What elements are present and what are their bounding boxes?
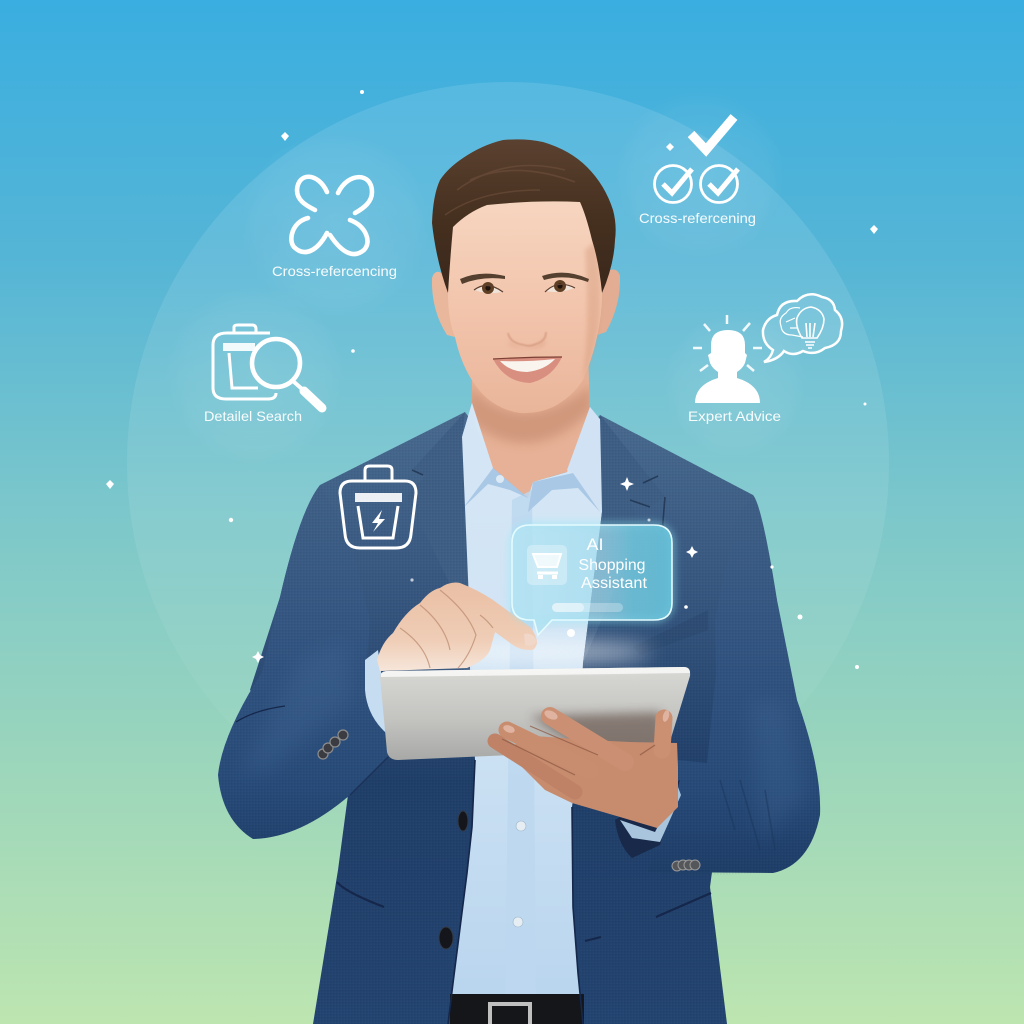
callout glow [512, 525, 672, 620]
right lapel [583, 415, 665, 663]
cart tile [527, 545, 567, 585]
jacket buttons [439, 811, 601, 949]
tablet [380, 667, 690, 760]
icon: expert with idea bubble [693, 294, 842, 403]
right lapel notch lines [412, 470, 665, 533]
progress bar [552, 603, 623, 612]
palm [510, 735, 678, 828]
right eye [545, 280, 575, 292]
face side shadow [583, 240, 600, 380]
shirt [451, 403, 603, 1000]
left eye [474, 282, 503, 294]
label: detailed search: Detailel Search [204, 408, 302, 424]
callout: AI Shopping Assistant: Assistant [581, 575, 648, 592]
brain outline [780, 308, 803, 337]
neck shadow [468, 385, 592, 443]
soft icon halos [165, 90, 807, 465]
right cuff buttons [672, 860, 700, 871]
rays [693, 315, 762, 371]
belt [450, 994, 584, 1024]
fingernails [502, 708, 670, 734]
sparkle particles [106, 90, 878, 669]
holding hand [495, 708, 678, 828]
shirt collar [462, 403, 603, 512]
label: cross-referencing left: Cross-refercencing [272, 263, 397, 279]
hair strands [445, 166, 575, 215]
icon: checkmarks [654, 117, 738, 202]
right ear [597, 270, 620, 335]
mouth [493, 357, 562, 383]
person [218, 139, 820, 1024]
glowing dot [567, 629, 575, 637]
screen light glow [420, 640, 650, 664]
right shirt cuff [620, 787, 681, 842]
icon: cross-referencing loops [291, 177, 372, 254]
shirt buttons [513, 821, 526, 927]
finger creases [502, 726, 655, 775]
label: cross-referencing right: Cross-refercening [639, 210, 756, 226]
thought cloud [763, 294, 842, 362]
left cuff buttons [318, 730, 348, 759]
right cuff interior [615, 780, 680, 858]
label: expert advice: Expert Advice [688, 408, 781, 424]
icon: shopping cart [533, 554, 561, 579]
hair [432, 139, 616, 293]
callout: AI Shopping Assistant [512, 525, 672, 637]
left eyebrow [460, 274, 505, 284]
large translucent orb [127, 82, 889, 844]
fingers [495, 716, 664, 792]
callout bubble [512, 525, 672, 635]
breast pocket [633, 610, 708, 655]
icon: detailed search [213, 325, 322, 408]
sleeve highlights [240, 640, 805, 840]
left lapel [407, 412, 470, 625]
right eyebrow [542, 273, 589, 282]
jacket body [250, 412, 777, 1024]
callout: AI Shopping Assistant: Shopping [578, 557, 646, 574]
left shirt cuff [365, 650, 390, 735]
nose [508, 332, 546, 349]
left sleeve [218, 485, 388, 839]
icon: shopping bag with lightning [340, 466, 416, 548]
jacket weave texture [218, 412, 820, 1024]
right sleeve [648, 495, 820, 873]
shirt placket [505, 490, 536, 1000]
light bulb [797, 307, 824, 348]
callout text: AI [586, 535, 604, 554]
expert silhouette [695, 330, 760, 403]
jacket pockets and seams [236, 706, 775, 1024]
face [448, 190, 602, 413]
pointing hand [377, 583, 537, 671]
left ear [432, 272, 455, 337]
neck [472, 340, 590, 498]
